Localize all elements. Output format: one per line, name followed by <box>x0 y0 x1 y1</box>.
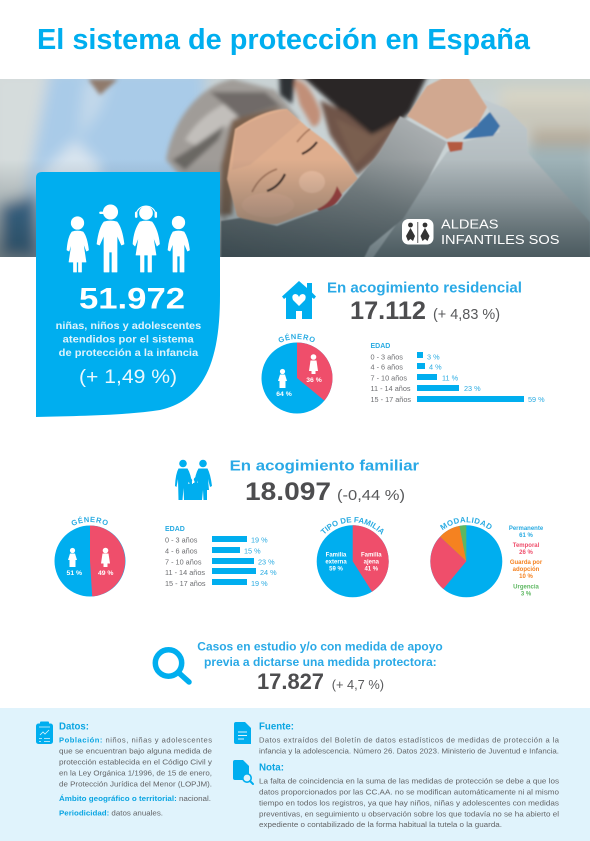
pie chart: gender: 49 % <box>98 570 113 577</box>
child's face <box>227 109 358 224</box>
description <box>56 320 201 359</box>
heading: En acogimiento residencial <box>327 280 522 297</box>
hero photo: child hugging adult <box>0 79 590 257</box>
block: nota: preventivas, en seguimiento u observación sobre los que todavía no se ha abierto el <box>259 810 559 819</box>
heading: Casos en estudio y/o con medida de apoyo <box>197 640 443 654</box>
block: datos: protección establecida en el Código Civil y <box>59 758 212 767</box>
variation: (+ 4,83 %) <box>433 307 500 323</box>
modality legend: 3 % <box>521 592 532 598</box>
bar chart: age: 11 % <box>442 374 459 382</box>
block: datos: que se encuentran bajo alguna medida de <box>59 747 212 756</box>
icon: four children <box>67 205 190 272</box>
pie chart: gender: 64 % <box>276 391 292 398</box>
footer panel <box>0 708 590 841</box>
pie chart: modality: MODALIDAD <box>440 516 492 530</box>
bar chart: age <box>165 526 277 588</box>
modality legend: Temporal <box>513 543 540 549</box>
modality legend: Urgencia <box>513 584 539 590</box>
bar chart: age: 11 - 14 años <box>165 568 205 577</box>
block: datos: Población: niños, niñas y adolescentes <box>59 736 212 745</box>
pie chart: family type: Familia <box>361 553 382 559</box>
panel: family care <box>54 458 544 598</box>
heading: previa a dictarse una medida protectora: <box>204 655 437 669</box>
panel: residential care <box>262 280 545 414</box>
bar chart: age: 4 - 6 años <box>165 546 198 556</box>
block: fuente: infancia y la adolescencia. Número 26. Datos 2023. Ministerio de Juventud e Infancia. <box>259 747 559 756</box>
pie chart: family type: 41 % <box>364 567 379 573</box>
modality legend: 10 % <box>519 574 533 580</box>
block: datos: Periodicidad: datos anuales. <box>59 809 163 818</box>
pie chart: gender: 36 % <box>306 377 322 384</box>
total number: 51.972 <box>79 282 185 316</box>
number: 17.827 <box>257 669 324 694</box>
block: nota: Nota: <box>259 762 284 774</box>
bar chart: age: 19 % <box>251 536 268 544</box>
bar chart: age <box>370 343 545 404</box>
pie chart: gender <box>262 333 332 414</box>
block: datos: de Protección Jurídica del Menor (LOPJM). <box>59 780 212 789</box>
man's hair, ear and neck <box>278 70 430 175</box>
bar chart: age: 15 - 17 años <box>165 579 206 588</box>
icon: document <box>234 722 251 744</box>
bar chart: age: 4 % <box>429 362 442 372</box>
grey sweater <box>221 76 590 262</box>
block: nota: expediente o contabilizado de la forma habitual la tutela o la guarda. <box>259 820 502 829</box>
modality legend: adopción <box>513 567 540 573</box>
child's hair <box>166 79 300 222</box>
icon: family <box>175 460 212 500</box>
number: 18.097 <box>245 478 331 506</box>
modality legend: 26 % <box>519 550 533 556</box>
icon: clipboard <box>36 722 53 744</box>
icon: house with heart <box>282 281 316 319</box>
pie chart: family type: 59 % <box>329 567 343 573</box>
block: datos: Datos: <box>59 720 89 732</box>
description: niñas, niños y adolescentes <box>56 320 201 332</box>
logo: Aldeas Infantiles SOS: ALDEAS <box>441 216 499 232</box>
bar chart: age: EDAD <box>165 526 185 533</box>
bar chart: age: 0 - 3 años <box>370 352 403 362</box>
panel: total children <box>36 172 220 417</box>
bar chart: age: 59 % <box>528 395 545 404</box>
bar chart: age: 15 % <box>244 546 261 556</box>
block: datos <box>36 720 212 818</box>
pie chart: modality <box>430 516 544 598</box>
bar chart: age: 4 - 6 años <box>370 362 403 372</box>
bar chart: age: 23 % <box>464 384 481 393</box>
block: nota: La falta de coincidencia en la suma de las medidas de protección se debe a que los <box>259 777 559 786</box>
block: fuente: Fuente: <box>259 720 294 732</box>
icon: magnifier <box>155 650 189 682</box>
block: fuente: Datos extraídos del Boletín de datos estadísticos de medidas de protección a la <box>259 736 560 745</box>
block: datos: en la Ley Orgánica 1/1996, de 15 de enero, <box>59 769 212 778</box>
modality legend: 61 % <box>519 533 533 539</box>
block: datos: Ámbito geográfico o territorial: nacional. <box>59 794 211 803</box>
pie chart: gender: GÉNERO <box>72 516 108 526</box>
heading: En acogimiento familiar <box>230 458 419 475</box>
pie chart: family type: externa <box>325 560 347 566</box>
block: nota: tiempo en todos los registros, ya que hay niños, niñas y adolescentes con medidas <box>259 799 559 808</box>
logo: Aldeas Infantiles SOS <box>402 216 560 247</box>
bar chart: age: 7 - 10 años <box>370 374 407 382</box>
pie chart: family type <box>316 517 389 598</box>
panel: cases under study <box>155 640 443 694</box>
bar chart: age: 11 - 14 años <box>370 384 411 393</box>
bar chart: age: 0 - 3 años <box>165 536 198 544</box>
block: nota: datos proporcionados por las CC.AA. no se modifican automáticamente ni al mismo <box>259 788 559 797</box>
variation: (+ 4,7 %) <box>332 677 384 692</box>
pie chart: gender: 51 % <box>67 570 82 577</box>
bar chart: age: 7 - 10 años <box>165 558 202 566</box>
icon: document with magnifier <box>233 760 253 784</box>
pie chart: family type: Familia <box>326 553 347 559</box>
modality legend <box>509 526 544 598</box>
heading <box>197 640 443 669</box>
title: El sistema de protección en España <box>37 24 531 56</box>
description: de protección a la infancia <box>59 347 198 359</box>
pie chart: gender: GÉNERO <box>278 333 315 342</box>
logo: Aldeas Infantiles SOS: INFANTILES SOS <box>441 232 560 247</box>
pie chart: family type: ajena <box>364 560 380 566</box>
variation: (+ 1,49 %) <box>79 367 177 388</box>
bar chart: age: 24 % <box>260 568 277 577</box>
number: 17.112 <box>350 297 426 325</box>
bar chart: age: 3 % <box>427 352 440 362</box>
modality legend: Guarda por <box>510 560 543 566</box>
bar chart: age: 19 % <box>251 579 268 588</box>
pie chart: gender <box>54 516 126 596</box>
variation: (-0,44 %) <box>337 488 405 504</box>
block: nota <box>233 760 559 829</box>
logo icon <box>402 219 434 244</box>
pie chart: family type: TIPO DE FAMILIA <box>320 517 384 535</box>
block: fuente <box>234 720 560 756</box>
description: atendidos por el sistema <box>63 334 194 346</box>
bar chart: age: 15 - 17 años <box>370 395 411 404</box>
bar chart: age: 23 % <box>258 558 275 566</box>
bar chart: age: EDAD <box>370 343 390 350</box>
modality legend: Permanente <box>509 526 544 532</box>
